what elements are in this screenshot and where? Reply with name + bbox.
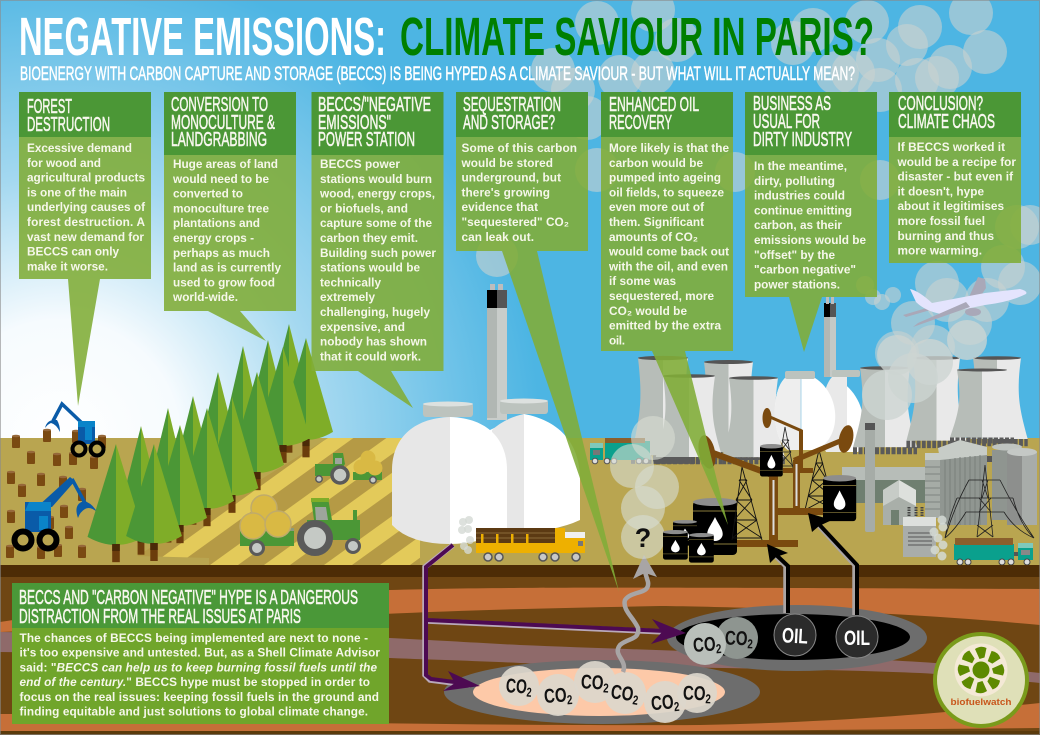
BECCS chimneys xyxy=(487,284,507,420)
CO2 storage reservoir xyxy=(444,660,760,724)
panel: business as usual: DIRTY INDUSTRY xyxy=(753,129,852,151)
panel: conclusion xyxy=(889,92,1021,263)
panel: enhanced oil recovery: pumped into ageing xyxy=(609,171,721,185)
panel: hype callout: finding equitable and just solutions to global climate change. xyxy=(20,704,368,718)
CO2 bubbles in storage: 2 xyxy=(673,699,680,714)
smoke clouds upper sky xyxy=(476,0,1040,375)
panel: conversion to monoculture: monoculture tree xyxy=(173,201,269,215)
panel: hype callout: end of the century." BECCS hype must be stopped in order to xyxy=(20,675,370,689)
panel: forest destruction: FOREST xyxy=(27,96,72,118)
panel: enhanced oil recovery: ENHANCED OIL xyxy=(609,94,699,116)
panel: BECCS power station: challenging, hugely xyxy=(320,305,430,319)
panel: BECCS power station: stations would be xyxy=(320,261,420,275)
transformer xyxy=(903,507,936,557)
panel: enhanced oil recovery: with the oil, and even xyxy=(608,259,728,273)
CO2 bubbles in storage: CO xyxy=(609,681,642,707)
panel: BECCS power station: expensive, and xyxy=(320,320,405,334)
cooling towers right group xyxy=(853,356,1028,451)
panel: BECCS power station: BECCS power xyxy=(320,157,400,171)
panel: hype callout: BECCS AND "CARBON NEGATIVE" HYPE IS A DANGEROUS xyxy=(19,587,358,609)
panel: hype callout: focus on the real issues: keeping fossil fuels in the ground and xyxy=(20,690,379,704)
panel: conversion to monoculture xyxy=(164,92,296,341)
large tractor with bales xyxy=(240,495,360,554)
CO2 and oil bubbles in oil field xyxy=(684,614,878,665)
log truck xyxy=(476,528,585,561)
panel: BECCS power station: extremely xyxy=(320,290,375,304)
cooling towers left group xyxy=(631,356,785,461)
panel: hype callout: said: "BECCS can help us to keep burning fossil fuels until the xyxy=(20,660,377,674)
CO2 bubbles in storage: CO xyxy=(683,683,713,706)
panel: enhanced oil recovery: oil. xyxy=(609,333,625,347)
CO2 bubbles in storage: CO xyxy=(650,691,682,715)
electricity pylon xyxy=(945,465,1034,538)
panel: conversion to monoculture: MONOCULTURE & xyxy=(171,112,275,134)
panel: forest destruction: agricultural products xyxy=(27,171,145,185)
derrick back xyxy=(778,427,793,468)
title: NEGATIVE EMISSIONS: xyxy=(19,7,386,67)
CO2 bubbles in storage: 2 xyxy=(566,692,573,707)
panel: hype callout: The chances of BECCS being implemented are next to none - xyxy=(20,631,368,645)
panel: business as usual: "offset" by the xyxy=(754,248,835,262)
panel: conclusion: more fossil fuel xyxy=(898,214,985,228)
panel: forest destruction: underlying causes of xyxy=(27,200,145,214)
panel: conversion to monoculture: perhaps as much xyxy=(173,246,270,260)
panel: sequestration and storage: can leak out. xyxy=(462,230,534,244)
panel: sequestration and storage xyxy=(456,92,619,592)
small smoke by transformer xyxy=(930,516,948,560)
panel: BECCS power station: that it could work. xyxy=(320,349,421,363)
panel: enhanced oil recovery: oil fields, to squeeze xyxy=(609,185,724,199)
panel: sequestration and storage: would be stored xyxy=(460,156,553,170)
CO2 bubbles in storage: CO xyxy=(543,684,575,708)
panel: conversion to monoculture: converted to xyxy=(173,187,243,201)
panel: conversion to monoculture: land as is currently xyxy=(173,261,281,275)
barrels on pump site xyxy=(760,444,856,521)
wavy grey leak arrow xyxy=(618,555,657,672)
panel: business as usual: dirty, polluting xyxy=(754,174,835,188)
panel: business as usual: industries could xyxy=(754,189,845,203)
CO2 bubbles in storage: CO xyxy=(505,675,537,699)
panel: conversion to monoculture: energy crops - xyxy=(173,231,254,245)
panel: conversion to monoculture: Huge areas of land xyxy=(173,157,278,171)
cultivated field with stripes xyxy=(138,438,420,565)
panel: enhanced oil recovery: would come back out xyxy=(608,245,729,259)
airplane xyxy=(903,277,1026,327)
panel: business as usual: In the meantime, xyxy=(754,159,847,173)
panel: enhanced oil recovery: if some was xyxy=(609,274,676,288)
panel: conversion to monoculture: world-wide. xyxy=(172,290,238,304)
panel: BECCS power station: technically xyxy=(320,275,381,289)
panel: enhanced oil recovery xyxy=(601,92,733,525)
CO2 bubbles in storage: 2 xyxy=(632,692,639,708)
panel: business as usual: BUSINESS AS xyxy=(753,93,831,115)
panel: BECCS power station: EMISSIONS" xyxy=(318,112,391,134)
underground strata xyxy=(0,565,1040,735)
BECCS power station domes xyxy=(392,398,580,544)
panel: sequestration and storage: AND STORAGE? xyxy=(463,112,555,134)
CO2 bubbles in storage xyxy=(499,661,717,723)
panel: enhanced oil recovery: even more out of xyxy=(609,200,704,214)
panel: sequestration and storage: Some of this carbon xyxy=(462,141,577,155)
panel: BECCS power station xyxy=(312,92,444,408)
panel: enhanced oil recovery: carbon would be xyxy=(609,156,703,170)
panel: conclusion: it doesn't, hype xyxy=(898,184,984,198)
panel: business as usual: "carbon negative" xyxy=(754,263,856,277)
panel: hype callout: it's too expensive and untested. But, as a Shell Climate Advisor xyxy=(20,646,380,660)
panel: conclusion: burning and thus xyxy=(898,229,994,243)
panel: BECCS power station: Building such power xyxy=(320,246,436,260)
panel: forest destruction xyxy=(19,92,151,406)
harvester lower xyxy=(14,477,97,548)
panel: BECCS power station: carbon they emit. xyxy=(320,231,418,245)
panel: conclusion: would be a recipe for xyxy=(896,155,1016,169)
panel: forest destruction: BECCS can only xyxy=(27,245,119,259)
oil barrels group xyxy=(663,498,737,563)
panel: enhanced oil recovery: amounts of CO₂ xyxy=(609,230,698,244)
sky background xyxy=(0,0,1040,440)
biofuelwatch logo: biofuelwatch xyxy=(950,697,1012,708)
pump jack back xyxy=(762,408,813,473)
panel: conversion to monoculture: would need to be xyxy=(172,172,269,186)
biofuelwatch logo xyxy=(935,634,1027,726)
panel: business as usual xyxy=(745,92,877,352)
panel: hype callout: DISTRACTION FROM THE REAL ISSUES AT PARIS xyxy=(19,606,301,628)
CO2 bubbles in storage: 2 xyxy=(526,685,532,700)
panel: BECCS power station: or biofuels, and xyxy=(320,201,408,215)
panel: forest destruction: DESTRUCTION xyxy=(27,114,110,136)
panel: sequestration and storage: SEQUESTRATION xyxy=(463,94,561,116)
panel: business as usual: emissions would be xyxy=(754,233,866,247)
panel: conclusion: If BECCS worked it xyxy=(898,140,1005,154)
oil reservoir xyxy=(667,605,927,671)
panel: business as usual: carbon, as their xyxy=(754,218,842,232)
panel: forest destruction: vast new demand for xyxy=(27,230,144,244)
panel: business as usual: power stations. xyxy=(754,277,840,291)
exhaust smoke by log truck xyxy=(458,516,474,554)
panel: BECCS power station: POWER STATION xyxy=(318,129,415,151)
tree stumps xyxy=(6,429,106,559)
panel: enhanced oil recovery: them. Significant xyxy=(609,215,704,229)
panel: conversion to monoculture: CONVERSION TO xyxy=(171,94,268,116)
panel: enhanced oil recovery: emitted by the extra xyxy=(609,319,721,333)
CO2 and oil bubbles in oil field: OIL xyxy=(844,627,870,650)
panel: enhanced oil recovery: CO₂ would be xyxy=(609,304,687,318)
ground xyxy=(0,438,1040,566)
panel: forest destruction: is one of the main xyxy=(27,185,127,199)
panel: enhanced oil recovery: sequestered, more xyxy=(609,289,714,303)
panel: conclusion: CONCLUSION? xyxy=(898,93,983,115)
rising smoke column with question mark xyxy=(610,416,679,559)
panel: BECCS power station: BECCS/"NEGATIVE xyxy=(318,94,431,116)
rising smoke column with question mark: ? xyxy=(635,523,651,553)
panel: BECCS power station: stations would burn xyxy=(320,172,432,186)
panel: business as usual: continue emitting xyxy=(754,203,852,217)
panel: BECCS power station: capture some of the xyxy=(320,216,432,230)
panel: sequestration and storage: "sequestered" CO₂ xyxy=(462,215,569,229)
CO2 and oil bubbles in oil field: CO xyxy=(692,633,724,657)
panel: forest destruction: make it worse. xyxy=(27,259,108,273)
pump jacks xyxy=(696,424,856,547)
panel: conclusion: disaster - but even if xyxy=(898,170,1013,184)
panel: sequestration and storage: evidence that xyxy=(462,200,538,214)
panel: conclusion: more warming. xyxy=(898,244,982,258)
panel: sequestration and storage: there's growing xyxy=(462,185,550,199)
harvester upper xyxy=(45,404,104,456)
black oil arrows xyxy=(767,513,857,615)
panel: enhanced oil recovery: RECOVERY xyxy=(609,112,672,134)
teal wood truck lower xyxy=(954,538,1033,565)
panel: conversion to monoculture: used to grow food xyxy=(173,275,275,289)
panel: conversion to monoculture: LANDGRABBING xyxy=(171,129,267,151)
panel: sequestration and storage: underground, but xyxy=(462,171,561,185)
upper smoke from right cooling towers xyxy=(862,320,987,420)
oil derricks xyxy=(732,450,835,540)
panel: forest destruction: Excessive demand xyxy=(27,141,132,155)
panel: conclusion: about it legitimises xyxy=(898,199,1004,213)
monoculture tree plantation xyxy=(88,324,333,562)
panel: conversion to monoculture: plantations and xyxy=(173,216,260,230)
panel: BECCS power station: wood, energy crops, xyxy=(319,187,435,201)
panel: hype callout xyxy=(12,583,389,724)
factory buildings xyxy=(842,423,1037,532)
panel: BECCS power station: nobody has shown xyxy=(320,335,427,349)
CO2 bubbles in storage: 2 xyxy=(603,680,609,696)
panel: forest destruction: for wood and xyxy=(27,156,101,170)
CO2 bubbles in storage: CO xyxy=(580,671,612,695)
panel: business as usual: USUAL FOR xyxy=(753,111,820,133)
CO2 bubbles in storage: 2 xyxy=(705,691,711,706)
CO2 and oil bubbles in oil field: CO xyxy=(725,628,755,651)
small tractor with bales xyxy=(315,450,382,483)
panel: forest destruction: forest destruction. A xyxy=(27,215,145,229)
CO2 and oil bubbles in oil field: OIL xyxy=(781,624,809,649)
right power station domes and chimney xyxy=(775,297,864,452)
CO2 and oil bubbles in oil field: 2 xyxy=(747,636,753,651)
CO2 and oil bubbles in oil field: 2 xyxy=(715,641,722,656)
purple CO2 pipes and arrows xyxy=(425,545,686,691)
teal wood truck upper xyxy=(590,438,650,464)
panel: enhanced oil recovery: More likely is that the xyxy=(609,141,729,155)
